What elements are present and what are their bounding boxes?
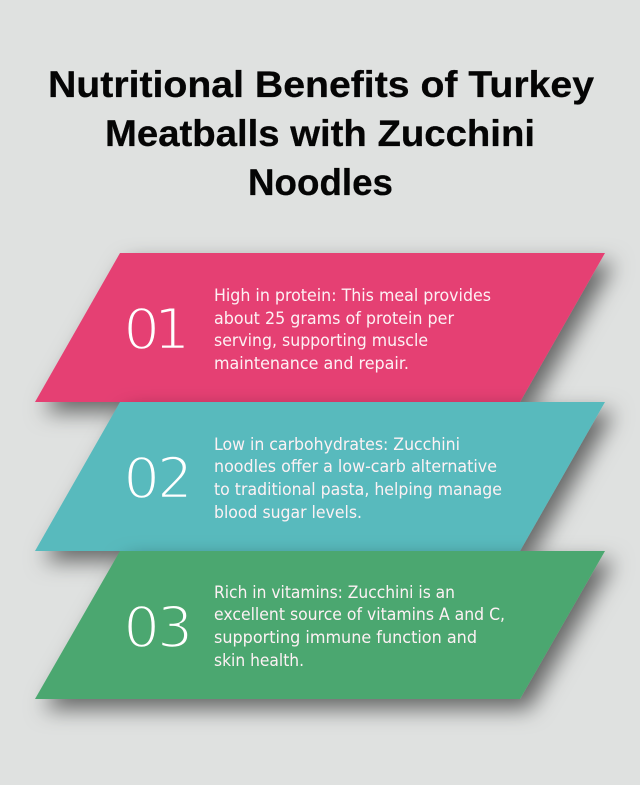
text: protein: serving, supporting muscle — [214, 331, 428, 350]
title: Noodles — [248, 162, 393, 203]
title: Nutritional Benefits of Turkey — [48, 64, 594, 105]
text: vitamins: skin health. — [214, 651, 304, 670]
text: vitamins — [214, 583, 505, 670]
teal parallelogram — [35, 402, 605, 551]
text: carbohydrates: Low in carbohydrates: Zucchini — [214, 435, 460, 454]
panel: low in carbohydrates — [35, 402, 605, 551]
text: carbohydrates — [214, 435, 502, 522]
title: Meatballs with Zucchini — [105, 113, 535, 154]
number 03: 03 — [124, 595, 190, 661]
pink parallelogram — [35, 253, 605, 402]
text: protein — [214, 286, 491, 373]
text: vitamins: Rich in vitamins: Zucchini is an — [214, 583, 455, 602]
text: carbohydrates: noodles offer a low-carb alternative — [214, 457, 497, 476]
text: protein: about 25 grams of protein per — [214, 309, 454, 328]
panel: high in protein — [35, 253, 605, 402]
title — [48, 64, 594, 203]
text: carbohydrates: blood sugar levels. — [214, 503, 362, 522]
text: protein: High in protein: This meal provides — [214, 286, 491, 305]
number 01: 01 — [124, 297, 185, 363]
number 02: 02 — [124, 446, 190, 512]
text: vitamins: excellent source of vitamins A and C, — [214, 605, 505, 624]
text: carbohydrates: to traditional pasta, helping manage — [214, 480, 502, 499]
panel: rich in vitamins — [35, 551, 605, 699]
text: vitamins: supporting immune function and — [214, 628, 477, 647]
text: protein: maintenance and repair. — [214, 354, 409, 373]
green parallelogram — [35, 551, 605, 699]
